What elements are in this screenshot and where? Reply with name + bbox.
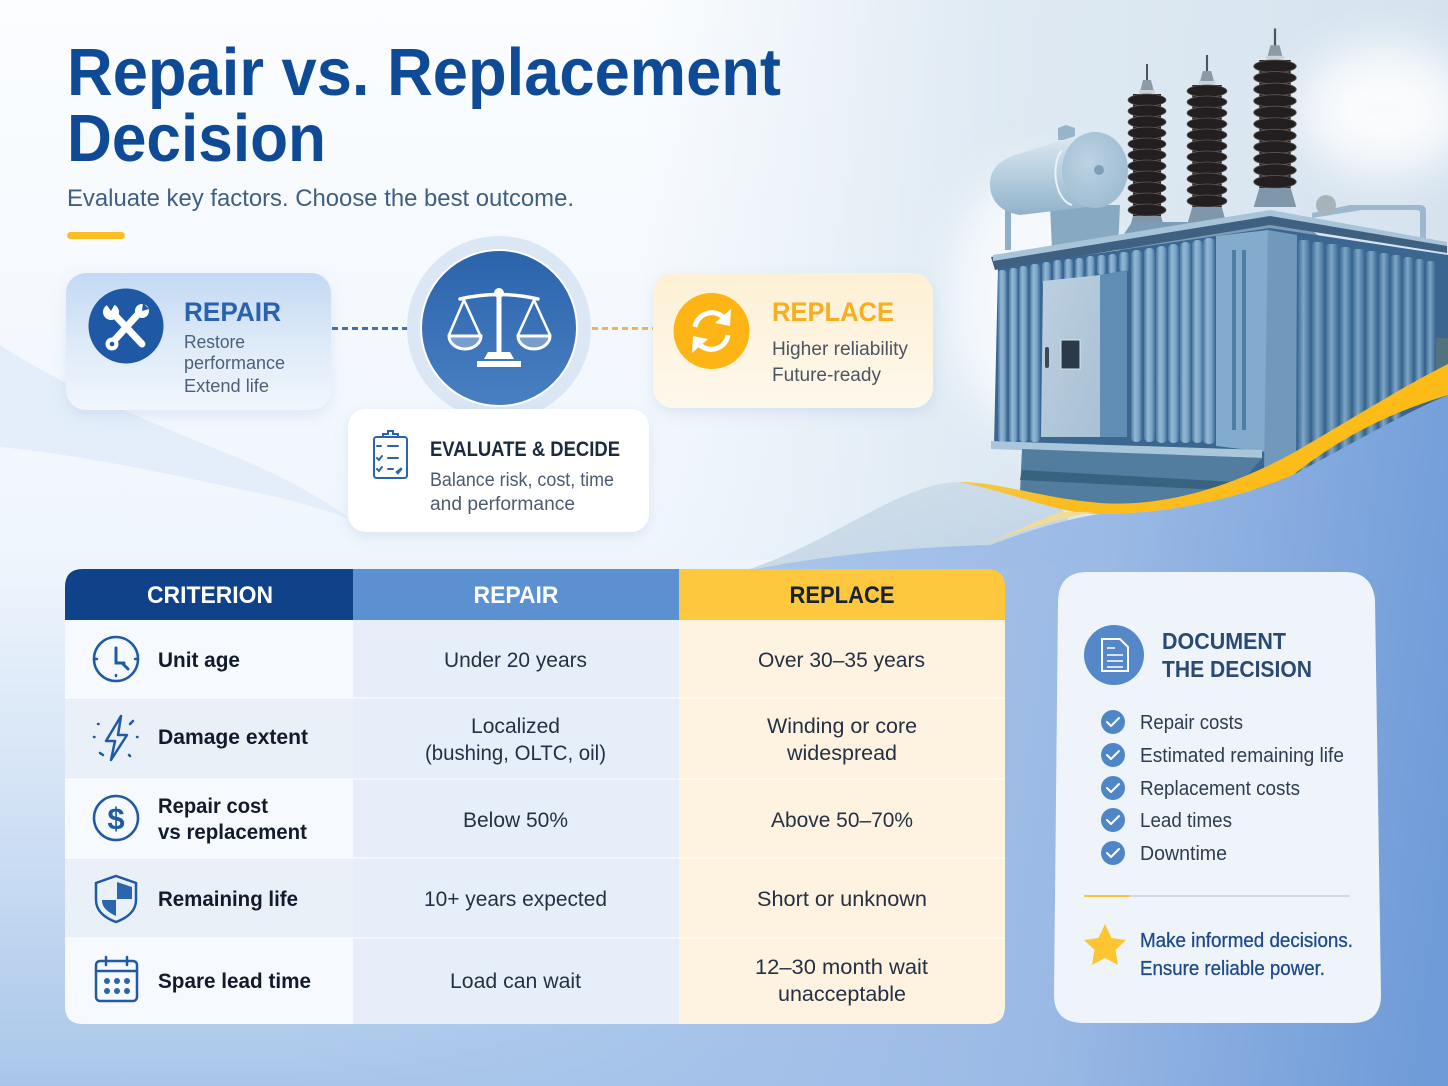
closing message: Ensure reliable power.	[1140, 958, 1325, 980]
icon: star	[1084, 924, 1126, 965]
table header: REPAIR	[474, 582, 558, 609]
row: unit age: Over 30–35 years	[758, 648, 925, 672]
door cabinet	[1041, 270, 1127, 437]
row: spare lead time	[96, 955, 928, 1006]
icon: dollar	[94, 796, 138, 840]
row: damage extent: Winding or core	[767, 714, 917, 738]
icon: clock	[94, 637, 138, 681]
arrow: replace connector	[592, 327, 653, 330]
panel: evaluate and decide	[348, 409, 649, 532]
accent bar	[67, 232, 125, 239]
panel: document the decision	[1054, 572, 1381, 1023]
transformer photo illustration	[990, 29, 1448, 506]
closing message: Make informed decisions.	[1140, 930, 1353, 952]
lower rail	[991, 441, 1262, 458]
icon: balance scale	[407, 236, 591, 420]
base	[1020, 449, 1262, 506]
arrow: repair connector	[332, 327, 408, 330]
row: damage extent	[94, 714, 917, 765]
checklist: Repair costs	[1140, 712, 1243, 734]
conservator tank	[990, 125, 1128, 250]
row: spare lead time: unacceptable	[778, 982, 906, 1006]
left face fins	[998, 238, 1215, 444]
repair text: Restore	[184, 332, 245, 352]
row: remaining life	[96, 876, 927, 922]
panel: repair	[66, 273, 331, 410]
row: damage extent: Damage extent	[158, 726, 308, 749]
icon: document	[1084, 625, 1144, 685]
replace text: Higher reliability	[772, 339, 908, 360]
panel: replace	[653, 273, 933, 408]
checklist: Estimated remaining life	[1140, 745, 1344, 767]
row: unit age	[94, 637, 925, 681]
deck	[1120, 222, 1332, 278]
row: remaining life: Short or unknown	[757, 887, 927, 911]
title: Decision	[67, 101, 326, 176]
row: unit age: Under 20 years	[444, 648, 587, 672]
replace text: Future-ready	[772, 365, 881, 386]
icon: refresh	[674, 293, 750, 369]
replace text	[772, 339, 908, 386]
evaluate text: and performance	[430, 494, 575, 515]
document heading: DOCUMENT	[1162, 628, 1286, 654]
evaluate text: Balance risk, cost, time	[430, 470, 614, 491]
repair text: Extend life	[184, 376, 269, 396]
row: repair cost	[94, 795, 913, 844]
row: spare lead time: Load can wait	[450, 969, 581, 993]
title: Repair vs. Replacement	[67, 35, 781, 110]
comparison table	[65, 569, 1005, 1024]
row: damage extent: widespread	[786, 741, 897, 765]
checklist: Replacement costs	[1140, 778, 1300, 800]
row: repair cost: Above 50–70%	[771, 808, 913, 832]
row: repair cost: vs replacement	[158, 821, 307, 844]
corner panel	[1216, 230, 1268, 452]
checklist: Lead times	[1140, 810, 1232, 832]
table header	[65, 569, 1005, 620]
table header: CRITERION	[147, 582, 273, 609]
decorative waves	[300, 364, 1448, 1086]
row: remaining life: 10+ years expected	[424, 887, 607, 911]
document heading: THE DECISION	[1162, 656, 1312, 682]
evaluate heading: EVALUATE & DECIDE	[430, 438, 620, 461]
row: unit age: Unit age	[158, 649, 240, 672]
icon: calendar	[96, 957, 137, 1001]
icon: wrench and screwdriver	[88, 288, 164, 364]
document heading	[1162, 628, 1312, 682]
row: damage extent: (bushing, OLTC, oil)	[425, 741, 606, 765]
checklist: Downtime	[1140, 843, 1227, 865]
bushings	[1128, 64, 1166, 234]
replace heading: REPLACE	[772, 297, 894, 327]
icon: dollar: $	[107, 801, 125, 836]
icon: clipboard checklist	[374, 431, 407, 478]
icon: lightning	[94, 716, 138, 760]
icon: shield	[96, 876, 136, 922]
title	[67, 35, 781, 176]
table header: REPLACE	[790, 582, 894, 609]
subtitle: Evaluate key factors. Choose the best outcome.	[67, 185, 574, 212]
repair text	[184, 332, 285, 396]
closing message	[1140, 930, 1353, 980]
right face fins	[1298, 240, 1435, 475]
row: spare lead time: 12–30 month wait	[755, 955, 928, 979]
checklist	[1101, 710, 1344, 865]
row: remaining life: Remaining life	[158, 888, 298, 911]
row: repair cost: Below 50%	[463, 808, 568, 832]
table body background	[65, 620, 1005, 1024]
tank body	[994, 228, 1448, 490]
repair heading: REPAIR	[184, 297, 281, 327]
row: damage extent: Localized	[471, 714, 560, 738]
evaluate text	[430, 470, 614, 515]
repair text: performance	[184, 353, 285, 373]
row: repair cost: Repair cost	[158, 795, 268, 818]
row: spare lead time: Spare lead time	[158, 970, 311, 993]
